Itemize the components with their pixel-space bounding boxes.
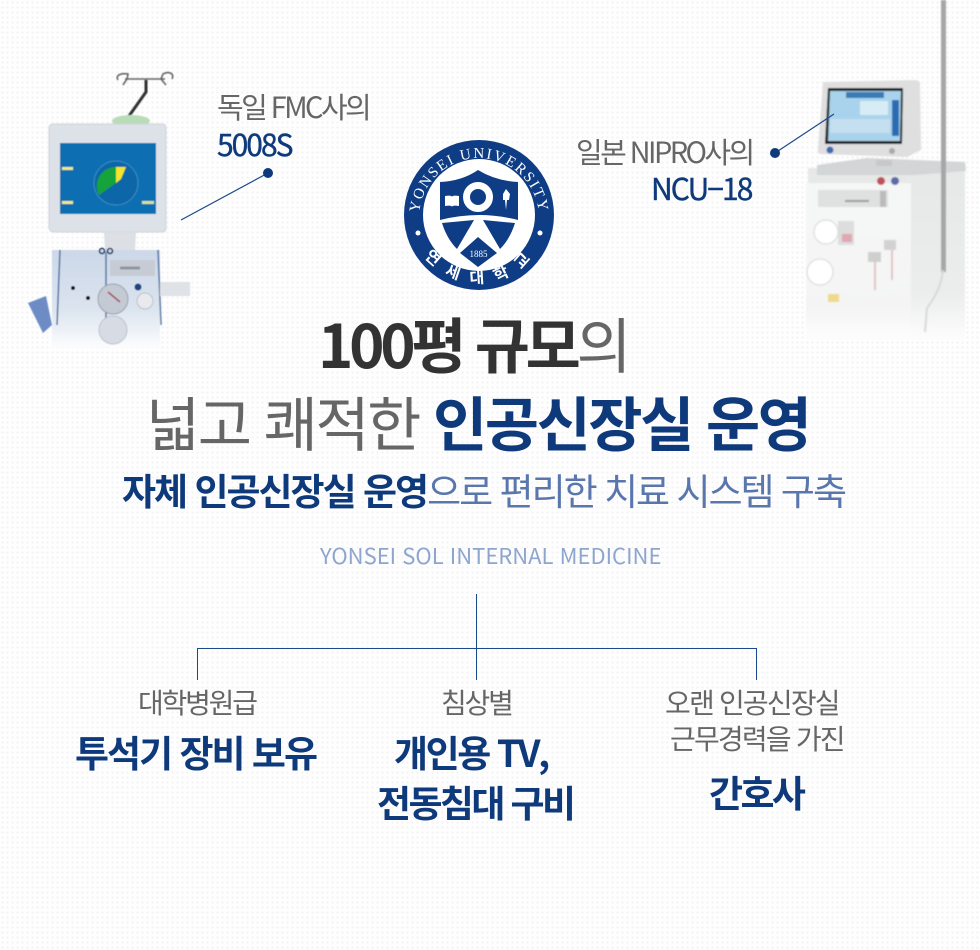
title line 1: 100평 규모의 xyxy=(318,299,627,386)
column 3 label line 2: 근무경력을 가진 xyxy=(670,718,844,758)
label: FMC origin: 독일 FMC사의 xyxy=(217,85,369,127)
logo: Yonsei University emblem: YONSEI UNIVERSITY xyxy=(409,148,548,211)
connector tree xyxy=(197,594,757,680)
logo: Yonsei University emblem: 연세대학교 xyxy=(426,250,530,284)
brand line: YONSEI SOL INTERNAL MEDICINE xyxy=(320,539,661,571)
column 2 value line 2: 전동침대 구비 xyxy=(377,774,573,828)
logo: Yonsei University emblem xyxy=(404,140,554,290)
callout: FMC 5008S pointer xyxy=(180,168,273,220)
column 2 value line 1: 개인용 TV, xyxy=(394,724,548,778)
column 3 value: 간호사 xyxy=(709,764,803,818)
column 1 label: 대학병원급 xyxy=(138,682,256,722)
title line 2: 넓고 쾌적한 인공신장실 운영 xyxy=(146,378,809,463)
machine: FMC 5008S dialysis unit xyxy=(28,71,190,348)
column 1 value: 투석기 장비 보유 xyxy=(75,724,316,778)
logo: Yonsei University emblem: 1885 xyxy=(470,249,488,259)
column 3 label line 1: 오랜 인공신장실 xyxy=(665,682,839,722)
label: model 5008S: 5008S xyxy=(217,121,291,165)
machine: NIPRO NCU-18 dialysis unit xyxy=(806,0,966,338)
column 2: rooms xyxy=(377,682,573,828)
label: model NCU-18: NCU−18 xyxy=(651,165,752,209)
column 2 label: 침상별 xyxy=(441,682,512,722)
label: NIPRO origin: 일본 NIPRO사의 xyxy=(576,130,753,172)
column 1: equipment xyxy=(75,682,317,778)
subtitle: 자체 인공신장실 운영으로 편리한 치료 시스템 구축 xyxy=(122,462,845,516)
column 3: nurses xyxy=(665,682,844,818)
callout: NCU-18 pointer xyxy=(770,114,834,158)
